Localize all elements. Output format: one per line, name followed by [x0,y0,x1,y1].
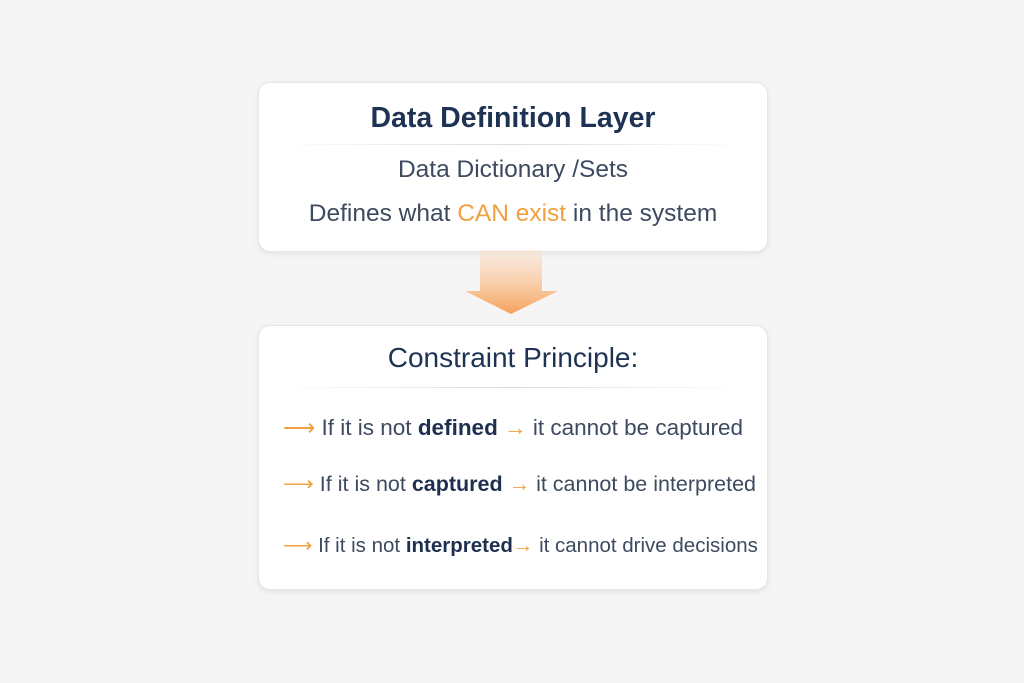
description: Defines what CAN exist in the system [309,200,717,227]
subtitle: Data Dictionary /Sets [398,156,628,183]
rule 1: ⟶ If it is not defined → it cannot be captured [283,415,743,440]
arrow: down [465,250,558,314]
panel: data definition layer [258,82,768,252]
rule 3: ⟶ If it is not interpreted→ it cannot drive decisions [283,534,758,557]
title: Data Definition Layer [370,102,656,134]
heading: Constraint Principle: [388,342,638,373]
rule 2: ⟶ If it is not captured → it cannot be interpreted [283,472,756,496]
panel: constraint principle [258,325,768,590]
